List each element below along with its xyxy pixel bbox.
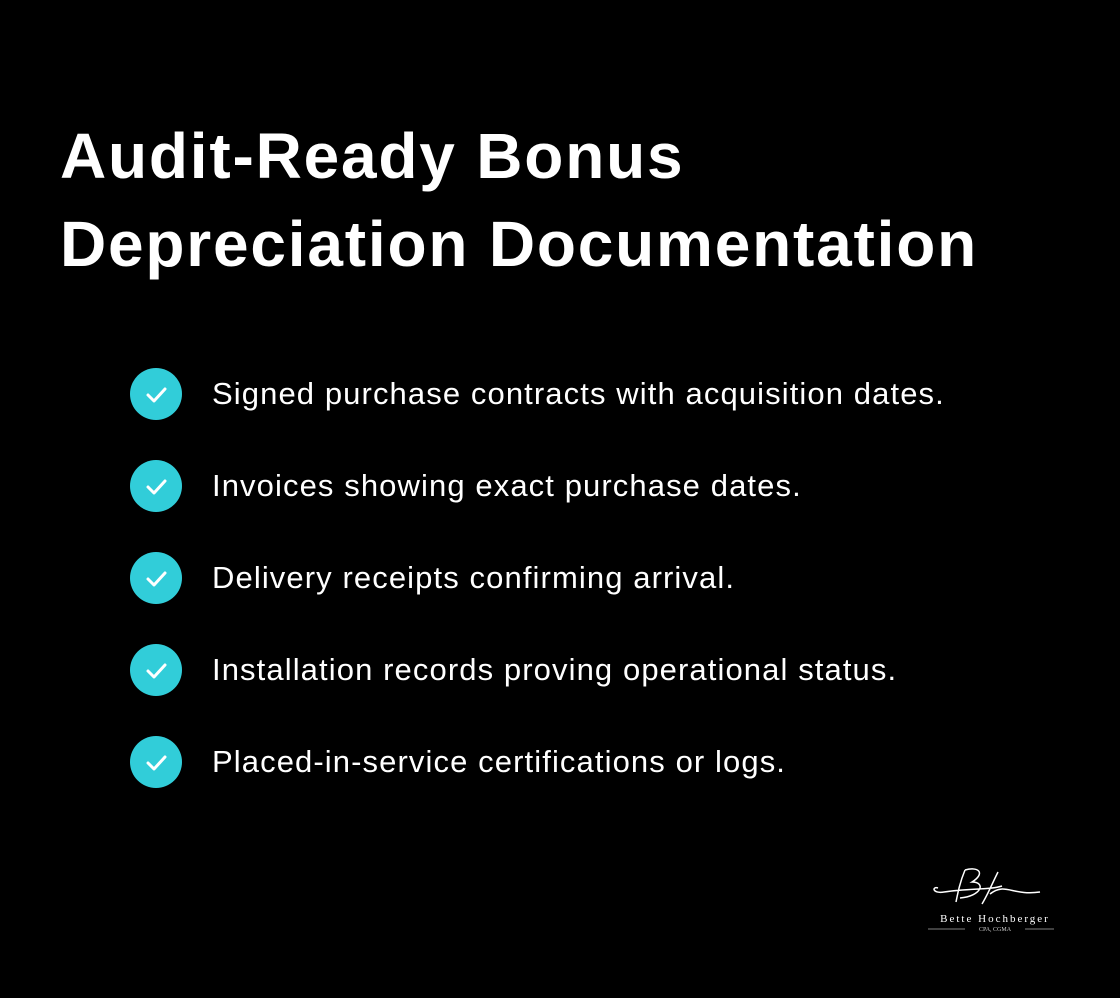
item 5 [130,736,786,788]
item 3 [130,552,735,604]
item 2: Invoices showing exact purchase dates. [212,468,802,503]
title: Depreciation Documentation [60,208,978,280]
item 4: Installation records proving operational status. [212,652,897,687]
title: Audit-Ready Bonus [60,120,684,192]
logo: Bette Hochberger [940,913,1050,925]
item 5: Placed-in-service certifications or logs. [212,744,786,779]
item 1: Signed purchase contracts with acquisition dates. [212,376,945,411]
item 2 [130,460,802,512]
item 1 [130,368,945,420]
item 3: Delivery receipts confirming arrival. [212,560,735,595]
title [60,120,978,280]
checklist [130,368,945,788]
logo: CPA, CGMA [979,927,1012,933]
logo [928,868,1054,933]
item 4 [130,644,897,696]
